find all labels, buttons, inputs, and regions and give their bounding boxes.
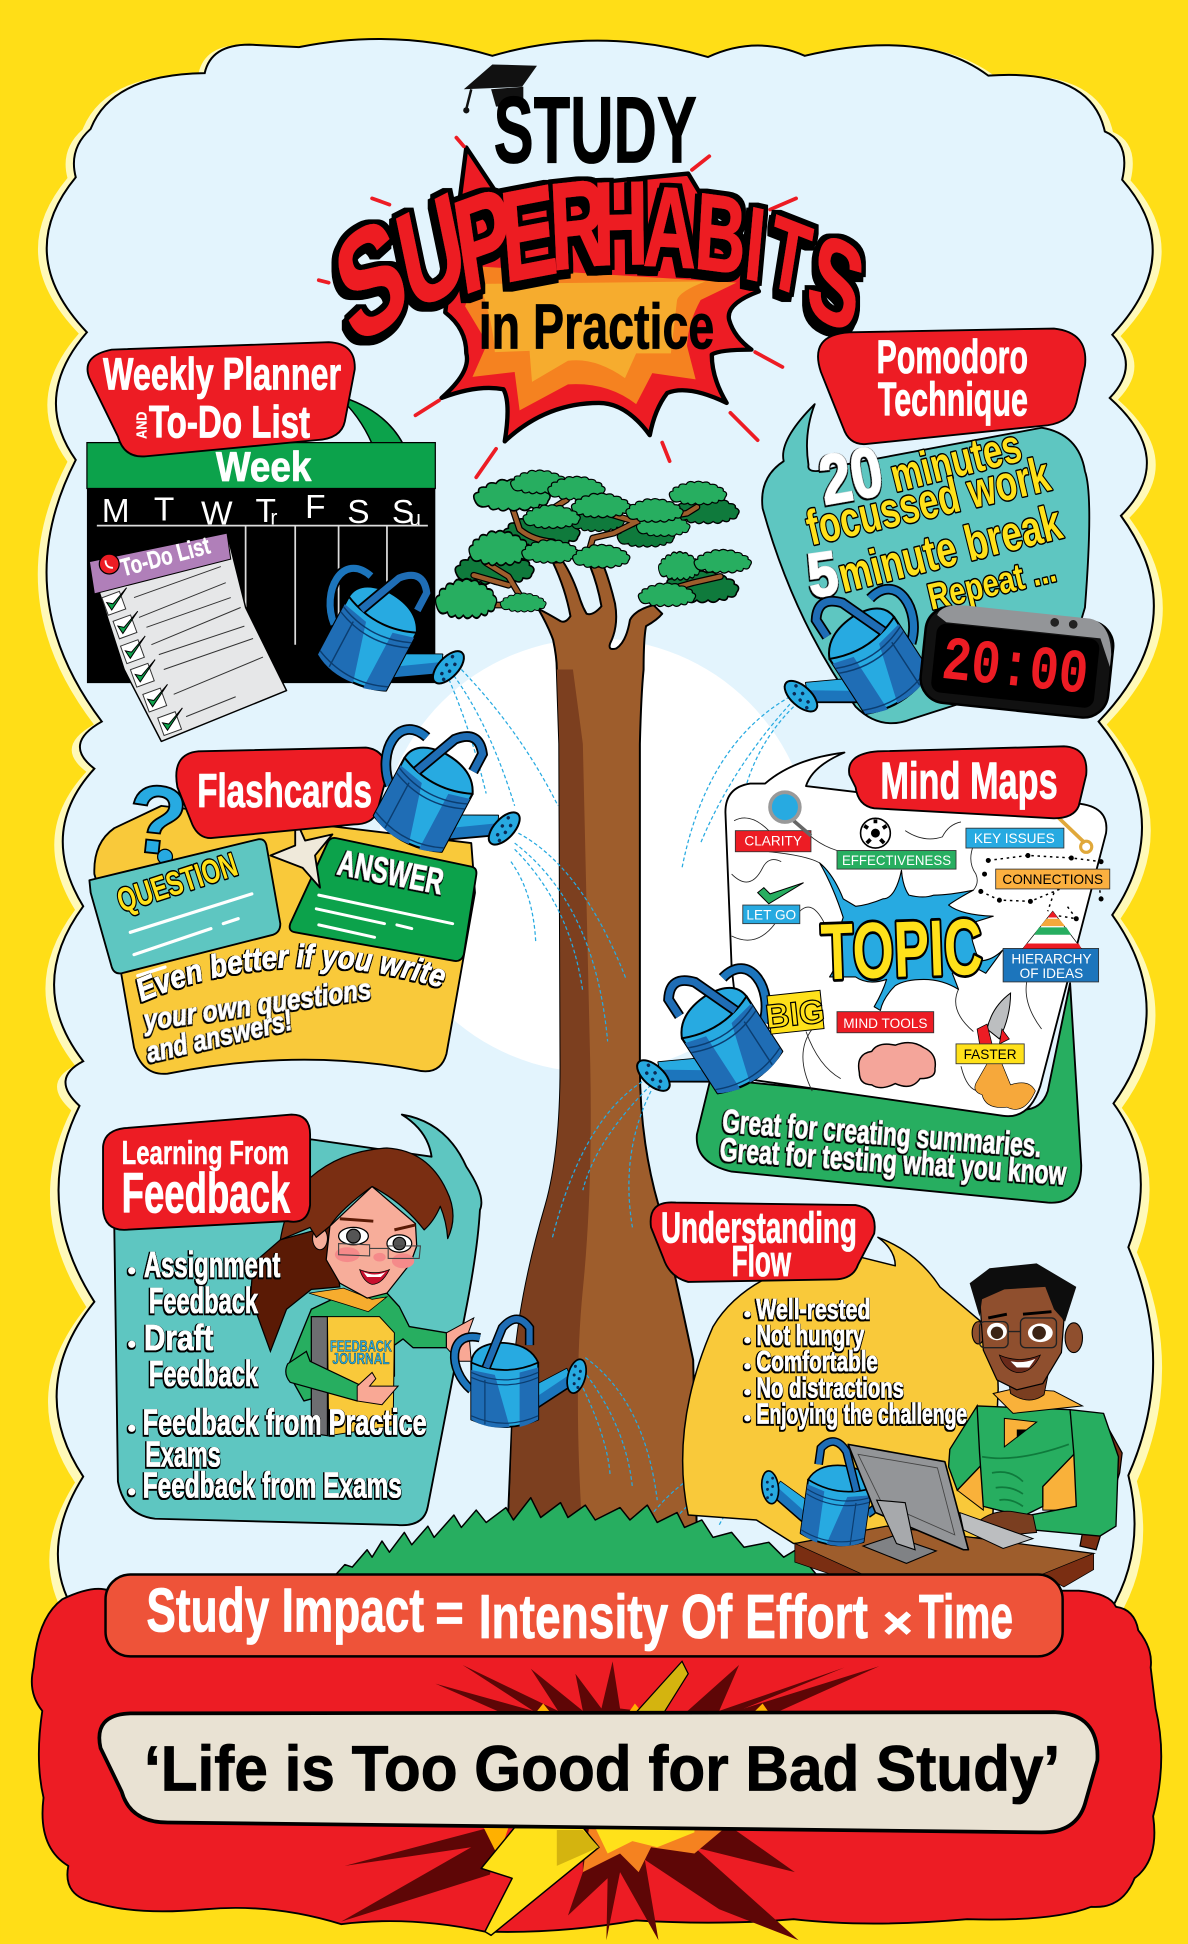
box: key issues (966, 828, 1064, 848)
formula bar (106, 1575, 1063, 1656)
feedback journal book: FEEDBACK (330, 1337, 392, 1355)
panel: pomodoro technique (753, 329, 1116, 754)
label: pomodoro: Technique (878, 372, 1028, 425)
teal speech bubble (114, 1115, 481, 1525)
label: mind maps (849, 746, 1086, 818)
label: flashcards (176, 748, 387, 838)
mind map wires (732, 818, 1042, 1091)
week header (87, 443, 435, 490)
chalkboard calendar: M (102, 493, 130, 530)
flashcards note: Even better if you write (135, 943, 446, 1004)
label: understanding flow (651, 1202, 875, 1286)
title: explosion burst (319, 138, 796, 477)
digital clock (918, 602, 1116, 720)
feedback journal book (311, 1317, 394, 1436)
title: STUDY: STUDY (494, 77, 697, 182)
grass hill (334, 1498, 818, 1577)
icon: green check (758, 883, 804, 904)
box: faster (956, 1044, 1024, 1064)
trunk shade (508, 669, 591, 1537)
to-do paper: To-Do List (117, 532, 213, 582)
green sweater (287, 1293, 446, 1401)
hood collar (309, 1288, 387, 1312)
green caption panel (697, 983, 1081, 1203)
chest logo (1004, 1418, 1037, 1447)
box: hierarchy of ideas (1003, 948, 1099, 982)
footer: explosion spikes (341, 1661, 879, 1940)
formula bar: Time (919, 1583, 1013, 1652)
answer card (290, 838, 476, 961)
box: connections: CONNECTIONS (1002, 872, 1103, 887)
pomodoro text: minute break (832, 494, 1068, 603)
white sun circle behind tree (378, 638, 812, 1072)
icon: watering can (353, 705, 548, 888)
cape (957, 1453, 1080, 1510)
cape collar (993, 1389, 1082, 1413)
bullet list: feedback types: • (128, 1331, 136, 1356)
quote bar (99, 1712, 1097, 1832)
chalkboard calendar: F (305, 489, 326, 526)
icon: soccer ball (861, 818, 890, 848)
bullet list: flow conditions: • (744, 1381, 751, 1403)
back hair (251, 1226, 340, 1351)
bullet list: feedback types (128, 1244, 280, 1394)
holding hand (357, 1372, 398, 1405)
box: hierarchy of ideas: OF IDEAS (1020, 966, 1083, 981)
bullet list: feedback types: Assignment (144, 1244, 280, 1285)
icon: watering can (753, 565, 951, 754)
box: effectiveness: EFFECTIVENESS (842, 853, 951, 868)
neck (1007, 1370, 1049, 1400)
box: mind tools: MIND TOOLS (843, 1016, 928, 1031)
icon: key (1055, 815, 1092, 852)
flashcards note: your own questions (140, 973, 373, 1037)
chalkboard calendar: T (154, 492, 174, 529)
network dots (981, 855, 1101, 919)
formula bar: Intensity Of Effort (479, 1583, 868, 1652)
keyboard (960, 1513, 1033, 1549)
icon: rocket and flame (975, 993, 1035, 1109)
title: in Practice: in Practice (479, 290, 714, 362)
title: graduation cap (463, 64, 537, 113)
panel: weekly planner (87, 342, 492, 741)
question card (89, 839, 280, 976)
face (980, 1277, 1064, 1390)
box: mind tools (837, 1012, 934, 1033)
chalkboard calendar: r (270, 506, 277, 529)
top hair (280, 1148, 453, 1240)
hair (970, 1263, 1076, 1322)
panel: mind maps (605, 746, 1110, 1203)
pomodoro text: 5 (803, 539, 842, 611)
face (326, 1186, 417, 1298)
title: SUPERHABITS: P (445, 157, 523, 323)
TOPIC: TOPIC (820, 902, 984, 996)
box: clarity (735, 831, 811, 852)
hand (977, 1511, 1037, 1535)
water sprays (449, 669, 794, 1562)
title: SUPERHABITS: R (547, 154, 610, 298)
box: connections (996, 869, 1110, 889)
panel: understanding flow (651, 1202, 1122, 1587)
bullet list: flow conditions: Comfortable (756, 1346, 878, 1378)
bullet list: flow conditions: • (744, 1355, 751, 1377)
bullet list: flow conditions: • (744, 1408, 751, 1430)
computer monitor (848, 1444, 968, 1563)
right arm (1030, 1410, 1118, 1536)
bullet list: flow conditions (744, 1294, 967, 1430)
title: SUPERHABITS: I (741, 185, 770, 304)
formula bar: Study Impact (146, 1577, 424, 1646)
icon: watering can (751, 1432, 893, 1552)
icon: question mark: ? (122, 764, 192, 877)
icon: brain (859, 1043, 935, 1088)
chair (1080, 1420, 1122, 1550)
formula bar: = (435, 1583, 464, 1644)
bullet list: flow conditions: Well-rested (756, 1294, 870, 1326)
bullet list: practice and exams: • (128, 1416, 136, 1441)
pomodoro text: minutes (885, 418, 1026, 502)
label: weekly planner: AND (134, 411, 150, 439)
branches inner (474, 500, 720, 605)
chalkboard calendar: W (201, 495, 233, 532)
label: understanding flow: Understanding (661, 1204, 857, 1252)
bullet list: feedback types: Feedback (149, 1353, 259, 1394)
bullet list: feedback types: Draft (144, 1317, 213, 1358)
dotted connections (981, 855, 1101, 919)
girl character (251, 1148, 474, 1436)
mind maps caption: Great for creating summaries. (721, 1103, 1043, 1165)
footer: lightning bolt (481, 1661, 688, 1935)
bullet list: feedback types: • (128, 1258, 136, 1283)
icon: watering can (605, 944, 803, 1133)
mind maps caption (719, 1103, 1068, 1193)
label: learning from feedback (103, 1115, 310, 1230)
pomodoro text: focussed work (801, 446, 1055, 556)
label: understanding flow: Flow (732, 1238, 791, 1286)
pomodoro text: 20 (814, 432, 888, 519)
dark foliage (455, 497, 739, 603)
label: flashcards: Flashcards (197, 764, 372, 817)
bullet list: flow conditions: Enjoying the challenge (756, 1398, 967, 1430)
icon: watering can (455, 1319, 590, 1428)
bullet list: flow conditions: No distractions (756, 1372, 904, 1404)
speech tail: planner (337, 395, 403, 444)
lower arm (286, 1351, 362, 1401)
bullet list: flow conditions: Not hungry (756, 1320, 864, 1352)
bullet list: practice and exams: Feedback from Practice (143, 1401, 427, 1442)
yellow speech bubble (683, 1237, 998, 1544)
light foliage (436, 470, 751, 618)
feedback journal book: JOURNAL (332, 1350, 390, 1368)
box: big: BIG (764, 993, 827, 1036)
tree (436, 470, 751, 1537)
label: weekly planner (88, 342, 355, 456)
answer card: ANSWER (335, 842, 447, 902)
bullet list: practice and exams: Feedback from Exams (143, 1465, 402, 1506)
icon: magnifier (770, 792, 811, 836)
to-do paper (89, 532, 287, 741)
label: learning from feedback: Feedback (122, 1162, 290, 1226)
boy character (949, 1263, 1122, 1550)
white mind map sheet (725, 753, 1106, 1116)
sky-blue cloud panel (47, 39, 1154, 1612)
chalkboard calendar: S (392, 494, 414, 531)
formula bar: × (883, 1599, 913, 1648)
title: SUPERHABITS: A (642, 163, 698, 293)
box: clarity: CLARITY (744, 834, 802, 849)
title: SUPERHABITS: T (762, 195, 818, 320)
flashcards note: and answers! (143, 1004, 296, 1069)
label: mind maps: Mind Maps (880, 752, 1058, 810)
ears (1065, 1323, 1082, 1353)
label: pomodoro: Pomodoro (877, 330, 1028, 383)
quote bar: ‘Life is Too Good for Bad Study’ (144, 1732, 1060, 1804)
bullet list: practice and exams: • (128, 1479, 136, 1504)
flashcards note (135, 943, 446, 1069)
label: weekly planner: To-Do List (149, 396, 310, 448)
hand on can (446, 1318, 474, 1361)
panel: flashcards (88, 724, 521, 1075)
cream cloud edge (38, 39, 1163, 1618)
footer: red cloud (32, 1589, 1161, 1932)
question card: QUESTION (113, 847, 242, 920)
pomodoro text (801, 418, 1068, 618)
teal speech bubble (762, 404, 1089, 723)
chalkboard calendar: u (409, 508, 421, 531)
wooden desk (795, 1526, 1094, 1587)
bullet list: practice and exams (128, 1401, 427, 1506)
title: SUPERHABITS: S (320, 182, 421, 377)
label: weekly planner: Weekly Planner (103, 347, 341, 399)
label: learning from feedback: Learning From (122, 1135, 289, 1172)
box: let go: LET GO (746, 907, 796, 922)
chalkboard calendar: S (347, 494, 370, 531)
tree trunk (507, 562, 697, 1537)
title: SUPERHABITS: U (385, 161, 477, 341)
title: SUPERHABITS: E (496, 156, 562, 310)
bullet list: practice and exams: Exams (145, 1434, 221, 1475)
branches (474, 500, 720, 605)
torso (977, 1406, 1075, 1516)
label: pomodoro (818, 329, 1085, 444)
chalkboard calendar: T (256, 493, 276, 530)
yellow panel (94, 806, 475, 1074)
blue splat (820, 863, 1003, 1010)
box: hierarchy of ideas: HIERARCHY (1011, 951, 1092, 966)
title: SUPERHABITS: H (592, 158, 649, 292)
title: SUPERHABITS: S (798, 206, 874, 360)
icon: watering can (297, 543, 492, 726)
title: SUPERHABITS: B (692, 170, 749, 298)
pomodoro text: Repeat ... (924, 548, 1060, 618)
chalkboard calendar (87, 488, 435, 683)
left arm (949, 1406, 983, 1490)
week header: Week (216, 443, 312, 490)
icon: star (270, 818, 332, 888)
icon: pyramid (1023, 911, 1081, 948)
bullet list: flow conditions: • (744, 1329, 751, 1351)
panel: learning from feedback (103, 1115, 590, 1525)
box: key issues: KEY ISSUES (974, 831, 1055, 846)
digital clock: 20:00 (938, 626, 1091, 712)
box: faster: FASTER (964, 1047, 1017, 1062)
bullet list: flow conditions: • (744, 1303, 751, 1325)
bullet list: feedback types: Feedback (149, 1280, 259, 1321)
